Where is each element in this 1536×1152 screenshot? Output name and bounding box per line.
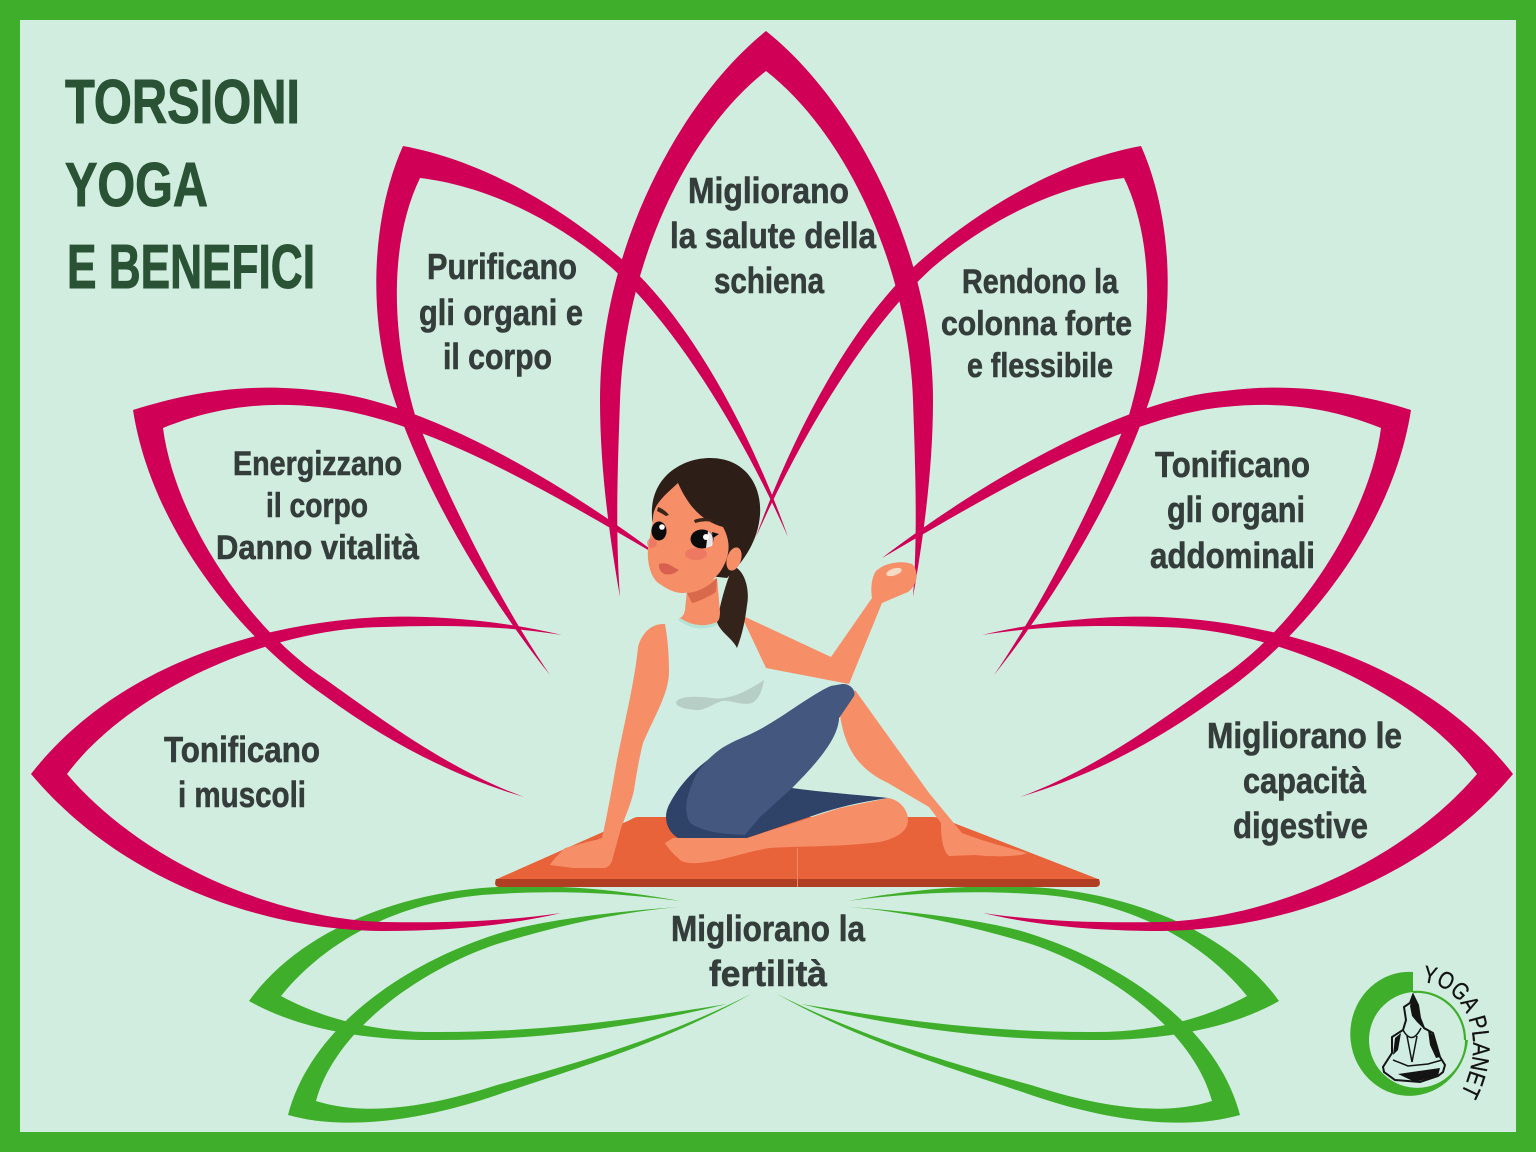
- text: energia: il corpo: [266, 487, 368, 525]
- eyes: [652, 507, 719, 548]
- title: E BENEFICI: [67, 233, 315, 302]
- text: schiena: [670, 170, 877, 301]
- supporting arm: [550, 624, 669, 868]
- yoga figure on mat: [495, 458, 1100, 887]
- text: energia: [216, 445, 419, 567]
- title: YOGA: [65, 151, 208, 220]
- leggings: [666, 684, 888, 838]
- logo: Yoga Planet: [1350, 965, 1490, 1100]
- ponytail: [717, 566, 748, 648]
- text: organi e corpo: gli organi e: [419, 292, 583, 333]
- text: schiena: schiena: [714, 260, 825, 301]
- text: capacità digestive: Migliorano le: [1207, 715, 1402, 756]
- logo ring: [1350, 972, 1468, 1096]
- petal: upper right: [882, 388, 1411, 797]
- text: organi e corpo: [419, 246, 583, 377]
- text: fertilità: fertilità: [709, 953, 828, 994]
- petal: center top: [600, 31, 933, 597]
- tank top: [628, 614, 849, 817]
- petal: green lower left: [288, 907, 751, 1123]
- text: colonna: e flessibile: [967, 347, 1113, 385]
- text: capacità digestive: capacità: [1243, 760, 1367, 801]
- logo: Yoga Planet: YOGA PLANET: [1426, 965, 1490, 1100]
- text: colonna: colonna forte: [941, 305, 1132, 343]
- petal: far right: [982, 617, 1513, 931]
- text: schiena: la salute della: [670, 215, 877, 256]
- text: capacità digestive: [1207, 715, 1402, 846]
- logo meditating figure: [1383, 995, 1445, 1082]
- text: energia: Energizzano: [233, 445, 402, 483]
- title: TORSIONI: [65, 68, 300, 137]
- bent leg and foot: [665, 798, 908, 863]
- neck trim: [678, 617, 717, 629]
- text: organi addominali: addominali: [1150, 535, 1315, 576]
- yoga mat: [495, 817, 1100, 887]
- petal: upper left: [133, 388, 662, 797]
- cheeks: [647, 538, 707, 560]
- text: organi e corpo: Purificano: [427, 246, 577, 287]
- text: schiena: Migliorano: [688, 170, 849, 211]
- petal: green upper right: [801, 886, 1279, 1040]
- text: energia: Danno vitalità: [216, 529, 419, 567]
- lotus: crimson petals: [31, 31, 1513, 931]
- tank shadow: [676, 680, 764, 710]
- raised lower leg: [840, 690, 1027, 856]
- petal: green upper left: [249, 886, 727, 1040]
- text: organi addominali: [1150, 444, 1315, 576]
- text: organi addominali: Tonificano: [1155, 444, 1310, 485]
- lips: [659, 563, 679, 574]
- neck: [680, 578, 720, 625]
- petal: green lower right: [777, 907, 1240, 1123]
- palm highlight: [885, 566, 903, 578]
- raised arm: [741, 562, 917, 684]
- text: organi e corpo: il corpo: [443, 336, 552, 377]
- text: muscoli: i muscoli: [178, 774, 306, 815]
- text: fertilità: Migliorano la: [671, 908, 866, 949]
- ear: [724, 545, 744, 573]
- petal: top left: [376, 146, 788, 675]
- text: colonna: Rendono la: [962, 263, 1119, 301]
- mat hand shadow: [573, 838, 598, 852]
- petal: top right: [756, 146, 1168, 675]
- petal: far left: [31, 617, 562, 931]
- face: [648, 483, 729, 593]
- hair: [652, 458, 760, 578]
- text: capacità digestive: digestive: [1233, 805, 1368, 846]
- neck shadow: [687, 578, 717, 603]
- title: [65, 68, 315, 302]
- text: colonna: [941, 263, 1132, 385]
- lotus: green bottom petals: [249, 886, 1279, 1123]
- text: fertilità: [671, 908, 866, 994]
- logo inner thin arc: [1413, 992, 1465, 1040]
- text: muscoli: Tonificano: [164, 729, 320, 770]
- text: organi addominali: gli organi: [1167, 489, 1305, 530]
- text: muscoli: [164, 729, 320, 815]
